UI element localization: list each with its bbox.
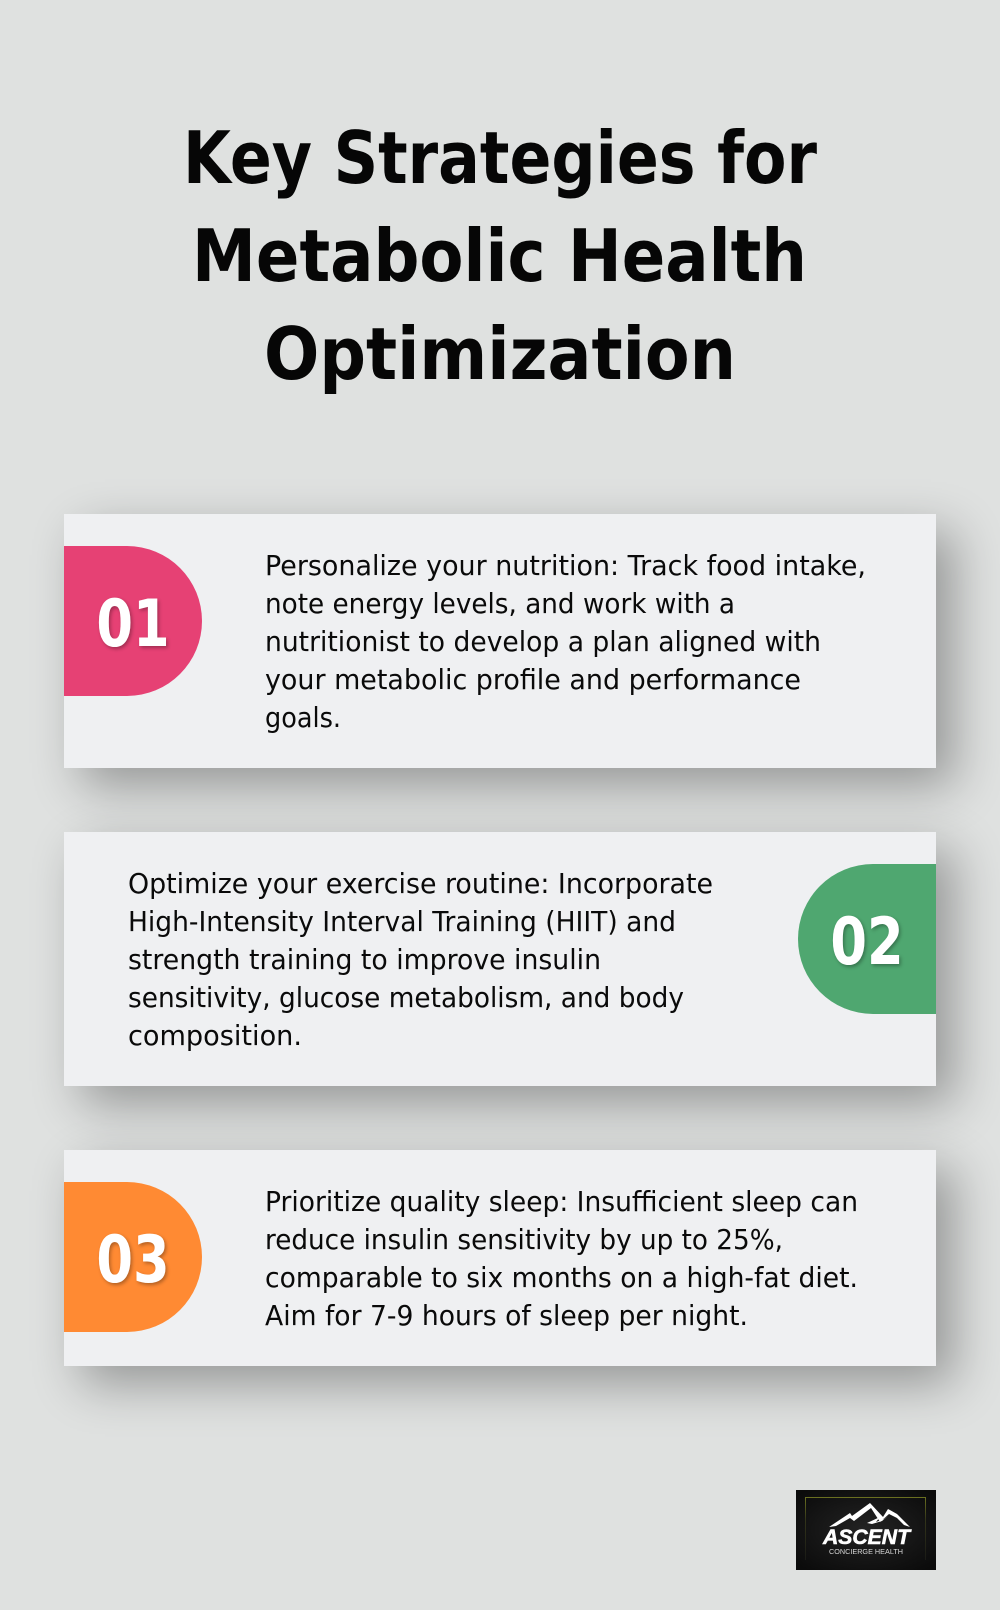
text block: step 02: High-Intensity Interval Training (HIIT) and [128,906,676,938]
text block: step 01: note energy levels, and work with a [265,588,735,620]
badge: 01 [64,546,202,696]
title: Optimization [264,312,736,396]
panel: step 01 personalize nutrition [64,514,936,768]
text block: step 01: goals. [265,702,341,734]
text block: step 02: Optimize your exercise routine: Incorporate [128,868,713,900]
text block: step 02: composition. [128,1020,302,1052]
text block: step 02: sensitivity, glucose metabolism, and body [128,982,684,1014]
text block: step 02 [128,868,713,1052]
text block: step 03: reduce insulin sensitivity by up to 25%, [265,1224,783,1256]
title: Metabolic Health [192,214,807,298]
text block: step 03: Aim for 7-9 hours of sleep per night. [265,1300,748,1332]
text block: step 01 [265,550,866,734]
badge: 03 [64,1182,202,1332]
number 02: 02 [830,905,904,980]
number 01: 01 [96,587,170,662]
title [183,116,817,396]
title: Key Strategies for [183,116,817,200]
number 03: 03 [96,1223,170,1298]
text block: step 03 [265,1186,858,1332]
text block: step 03: Prioritize quality sleep: Insufficient sleep can [265,1186,858,1218]
text block: step 03: comparable to six months on a high-fat diet. [265,1262,858,1294]
text block: step 01: Personalize your nutrition: Track food intake, [265,550,866,582]
panel: step 02 optimize exercise [64,832,936,1086]
text block: step 01: your metabolic profile and performance [265,664,801,696]
text block: step 01: nutritionist to develop a plan aligned with [265,626,821,658]
panel: step 03 prioritize sleep [64,1150,936,1366]
text block: step 02: strength training to improve insulin [128,944,601,976]
badge: 02 [798,864,936,1014]
logo: Ascent Concierge Health: ASCENT [822,1526,912,1549]
logo: Ascent Concierge Health: CONCIERGE HEALTH [829,1547,903,1556]
